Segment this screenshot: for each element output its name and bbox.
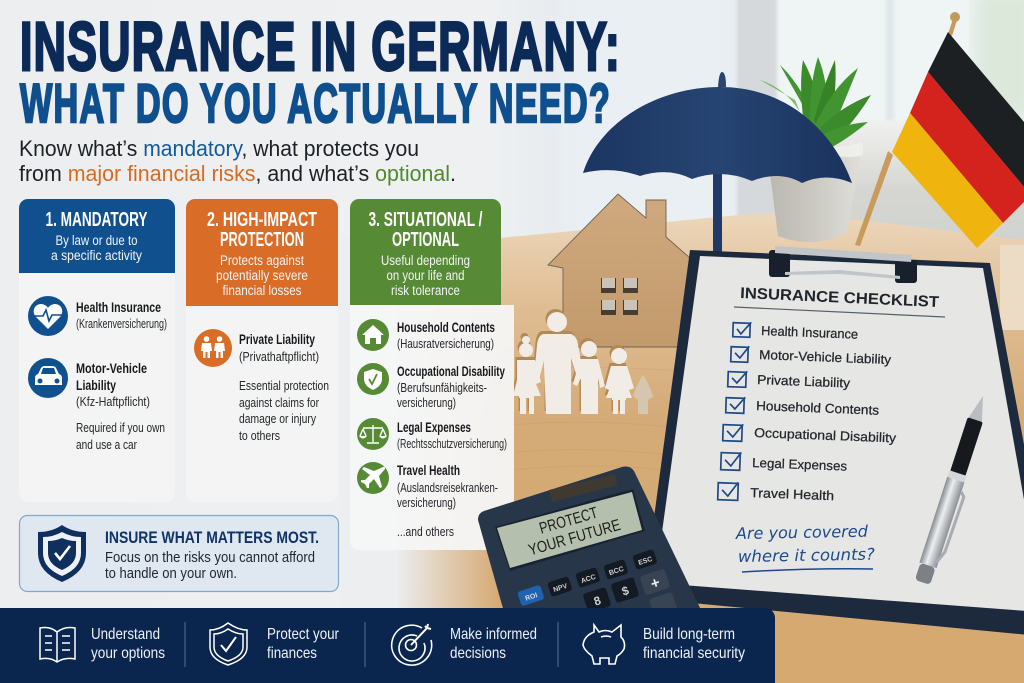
calculator keys: BCC bbox=[608, 566, 625, 577]
icon: people bbox=[194, 329, 232, 367]
benefit: build long-term financial security: financial security bbox=[643, 645, 745, 662]
item: household contents: (Hausratversicherung) bbox=[397, 337, 494, 351]
checklist items: Occupational Disability bbox=[754, 425, 897, 445]
handwritten note: Are you covered bbox=[735, 522, 869, 543]
checklist items: Travel Health bbox=[750, 485, 834, 503]
high-impact heading: PROTECTION bbox=[220, 229, 304, 251]
item: travel health: (Auslandsreisekranken- bbox=[397, 481, 498, 495]
title: WHAT DO YOU ACTUALLY NEED? bbox=[20, 72, 611, 134]
pen bbox=[914, 393, 995, 586]
checklist items: Legal Expenses bbox=[752, 455, 848, 474]
situational heading bbox=[368, 209, 483, 298]
calculator keys: NPV bbox=[553, 583, 569, 594]
item: motor-vehicle liability: Required if you own bbox=[76, 421, 165, 435]
plant in pot bbox=[760, 57, 871, 242]
benefit: understand your options: your options bbox=[91, 645, 165, 662]
item: household contents: Household Contents bbox=[397, 320, 495, 335]
mandatory heading: a specific activity bbox=[51, 248, 142, 263]
background: wooden table bbox=[340, 213, 1024, 683]
item: private liability: to others bbox=[239, 429, 280, 443]
item: household contents bbox=[397, 320, 495, 351]
situational heading: 3. SITUATIONAL / bbox=[368, 209, 483, 231]
calculator keys: ACC bbox=[580, 574, 597, 585]
callout text: to handle on your own. bbox=[105, 565, 237, 582]
benefit: protect your finances bbox=[267, 626, 340, 662]
item: private liability: Private Liability bbox=[239, 332, 315, 347]
icon: heart bbox=[28, 296, 68, 336]
high-impact heading: financial losses bbox=[222, 283, 302, 298]
high-impact heading bbox=[207, 209, 317, 298]
mandatory heading: 1. MANDATORY bbox=[46, 209, 148, 231]
mandatory heading: By law or due to bbox=[56, 233, 138, 248]
title: INSURANCE IN GERMANY: bbox=[20, 8, 621, 85]
panel: mandatory bbox=[19, 199, 175, 502]
calculator display text bbox=[522, 500, 623, 559]
checklist items: Motor-Vehicle Liability bbox=[759, 347, 892, 367]
checklist items: Health Insurance bbox=[761, 323, 858, 342]
callout text bbox=[105, 528, 319, 582]
checklist items: Household Contents bbox=[756, 398, 880, 418]
item: motor-vehicle liability bbox=[76, 361, 165, 452]
calculator display text: YOUR FUTURE bbox=[527, 517, 623, 559]
callout: insure what matters most bbox=[20, 516, 338, 592]
benefit: protect your finances: finances bbox=[267, 645, 317, 662]
clip bbox=[769, 246, 917, 283]
situational heading: OPTIONAL bbox=[392, 229, 459, 251]
calculator keys: ESC bbox=[638, 556, 653, 567]
icon: shield with check bbox=[38, 525, 86, 582]
item: motor-vehicle liability: and use a car bbox=[76, 438, 137, 452]
calculator keys: 8 bbox=[592, 593, 603, 609]
item: private liability: Essential protection bbox=[239, 379, 329, 393]
checklist heading: INSURANCE CHECKLIST bbox=[740, 285, 940, 311]
footer band bbox=[0, 608, 775, 683]
item: and others: ...and others bbox=[397, 525, 454, 539]
item: health insurance bbox=[76, 300, 167, 331]
item: health insurance: Health Insurance bbox=[76, 300, 161, 315]
item: private liability: (Privathaftpflicht) bbox=[239, 350, 319, 364]
situational heading: risk tolerance bbox=[391, 283, 460, 298]
item: motor-vehicle liability: Liability bbox=[76, 378, 116, 393]
item: occupational disability: versicherung) bbox=[397, 396, 456, 410]
item: private liability: damage or injury bbox=[239, 412, 317, 426]
benefit: understand your options: Understand bbox=[91, 626, 160, 643]
benefit: protect your finances: Protect your bbox=[267, 626, 340, 643]
item: travel health bbox=[397, 463, 498, 510]
subtitle: Know what’s mandatory, what protects you bbox=[19, 136, 419, 161]
handwritten note: where it counts? bbox=[738, 545, 876, 566]
item: occupational disability: (Berufsunfähigkeits- bbox=[397, 381, 487, 395]
benefit: build long-term financial security bbox=[643, 626, 745, 662]
icon: house bbox=[357, 319, 389, 351]
icon: target bbox=[392, 624, 432, 665]
checklist items bbox=[718, 322, 897, 503]
clipboard with checklist bbox=[644, 246, 1024, 636]
high-impact heading: potentially severe bbox=[216, 268, 308, 283]
calculator keys: ROI bbox=[524, 592, 539, 603]
item: legal expenses: (Rechtsschutzversicherung) bbox=[397, 437, 507, 451]
calculator display text: PROTECT bbox=[538, 505, 600, 538]
paper family cut-out bbox=[512, 309, 653, 414]
icon: shield bbox=[357, 363, 389, 395]
item: occupational disability: Occupational Disability bbox=[397, 364, 505, 379]
high-impact heading: Protects against bbox=[220, 253, 304, 268]
wooden house bbox=[548, 194, 690, 347]
icon: scales bbox=[357, 418, 389, 450]
benefit: make informed decisions bbox=[450, 626, 537, 662]
item: occupational disability bbox=[397, 364, 505, 410]
icon: car bbox=[28, 358, 68, 398]
icon: shield bbox=[210, 623, 247, 665]
item: travel health: versicherung) bbox=[397, 496, 456, 510]
subtitle: from major financial risks, and what’s optional. bbox=[19, 161, 456, 186]
situational heading: Useful depending bbox=[381, 253, 470, 268]
high-impact heading: 2. HIGH-IMPACT bbox=[207, 209, 317, 231]
calculator keys: $ bbox=[620, 583, 631, 599]
item: legal expenses bbox=[397, 420, 507, 451]
situational heading: on your life and bbox=[386, 268, 464, 283]
item: health insurance: (Krankenversicherung) bbox=[76, 317, 167, 331]
mandatory heading bbox=[46, 209, 148, 263]
icon: piggy bank bbox=[583, 625, 625, 664]
callout text: INSURE WHAT MATTERS MOST. bbox=[105, 528, 319, 547]
icon: plane bbox=[357, 462, 389, 494]
item: legal expenses: Legal Expenses bbox=[397, 420, 471, 435]
German flag bbox=[855, 12, 1024, 248]
benefit: understand your options bbox=[91, 626, 165, 662]
item: motor-vehicle liability: Motor-Vehicle bbox=[76, 361, 147, 376]
item: motor-vehicle liability: (Kfz-Haftpflicht) bbox=[76, 395, 150, 409]
subtitle bbox=[19, 136, 456, 186]
benefit: make informed decisions: Make informed bbox=[450, 626, 537, 643]
item: private liability: against claims for bbox=[239, 396, 319, 410]
handwritten note bbox=[735, 522, 876, 572]
checklist items: Private Liability bbox=[757, 372, 851, 391]
panel: high-impact protection bbox=[186, 199, 338, 502]
callout text: Focus on the risks you cannot afford bbox=[105, 549, 315, 566]
benefit: build long-term financial security: Build long-term bbox=[643, 626, 735, 643]
calculator keys: + bbox=[649, 574, 662, 593]
item: travel health: Travel Health bbox=[397, 463, 460, 478]
benefit: make informed decisions: decisions bbox=[450, 645, 506, 662]
title bbox=[20, 8, 621, 134]
umbrella bbox=[583, 72, 852, 252]
calculator keys bbox=[517, 549, 678, 618]
item: private liability bbox=[239, 332, 329, 443]
panel: situational / optional bbox=[350, 199, 514, 550]
calculator bbox=[478, 466, 702, 618]
icon: book bbox=[40, 628, 75, 662]
